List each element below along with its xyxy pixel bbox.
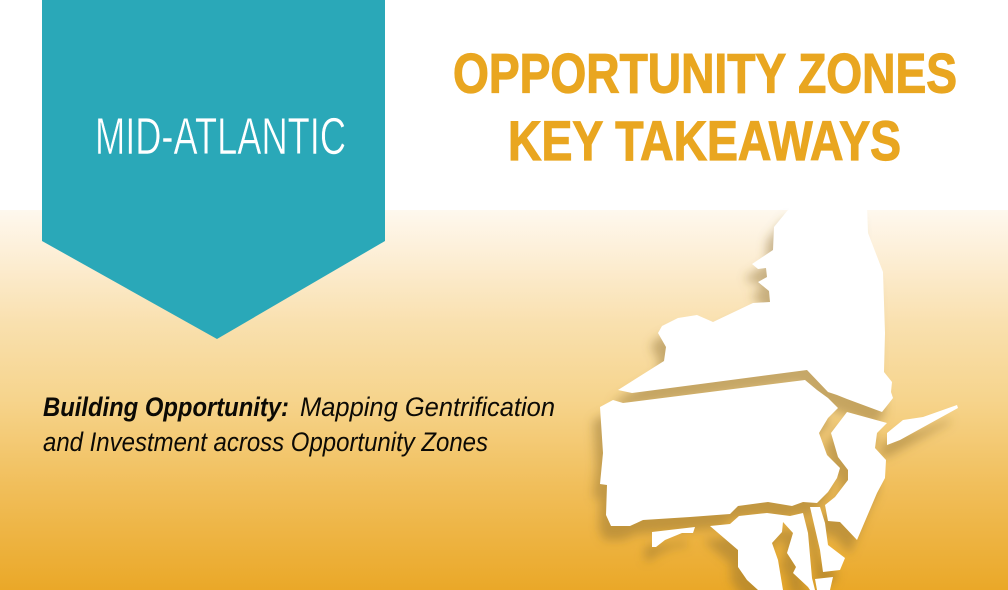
banner label: MID-ATLANTIC [95, 108, 346, 166]
subtitle text block: Mapping Gentrification [300, 392, 555, 422]
title [453, 42, 957, 172]
subtitle text block: and Investment across Opportunity Zones [43, 427, 488, 457]
map shadow [593, 219, 951, 590]
subtitle text block: Building Opportunity: [43, 392, 289, 422]
teal banner [42, 0, 385, 339]
title: KEY TAKEAWAYS [508, 109, 901, 172]
map: mid-atlantic states [593, 205, 958, 590]
background gradient panel [0, 210, 1008, 590]
state shapes [600, 205, 958, 590]
subtitle text block [43, 392, 555, 457]
